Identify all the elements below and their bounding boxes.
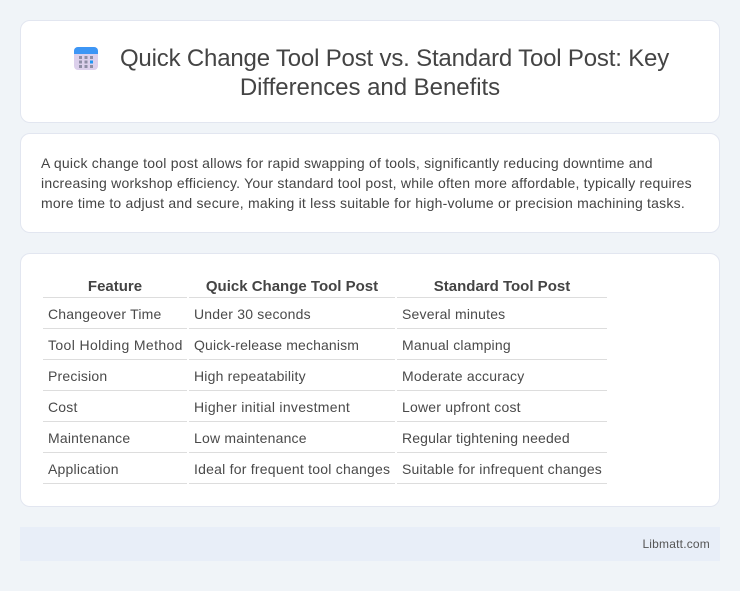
title line 2: Differences and Benefits [240, 74, 500, 101]
intro text [41, 155, 692, 211]
text: Ideal for frequent tool changes [194, 461, 390, 477]
intro card [20, 133, 720, 233]
table row: tool holding method: Tool Holding Method [48, 337, 183, 353]
text: Quick Change Tool Post [206, 278, 378, 295]
table row: precision: Precision [48, 368, 107, 384]
intro text: more time to adjust and secure, making it less suitable for high-volume or precision machining tasks. [41, 195, 685, 211]
text: Regular tightening needed [402, 430, 570, 446]
table row: cost: Cost [48, 399, 78, 415]
text: Lower upfront cost [402, 399, 521, 415]
table card [20, 253, 720, 507]
text: High repeatability [194, 368, 306, 384]
text: Moderate accuracy [402, 368, 524, 384]
table header: Feature [88, 278, 142, 295]
table row: application: Application [48, 461, 119, 477]
footer text: Libmatt.com [642, 537, 710, 551]
text: Under 30 seconds [194, 306, 311, 322]
text: Quick-release mechanism [194, 337, 359, 353]
title card [20, 20, 720, 123]
text: Several minutes [402, 306, 505, 322]
footer bar [20, 527, 720, 561]
text: Suitable for infrequent changes [402, 461, 602, 477]
table row: changeover time: Changeover Time [48, 306, 162, 322]
text: Standard Tool Post [434, 278, 570, 295]
title: Quick Change Tool Post vs. Standard Tool Post: Key [120, 45, 669, 72]
text: Higher initial investment [194, 399, 350, 415]
table row: maintenance: Maintenance [48, 430, 130, 446]
intro text: increasing workshop efficiency. Your standard tool post, while often more affordable, typically requires [41, 175, 692, 191]
intro text: A quick change tool post allows for rapid swapping of tools, significantly reducing downtime and [41, 155, 653, 171]
icon: calendar [74, 47, 98, 70]
text: Manual clamping [402, 337, 511, 353]
text: Low maintenance [194, 430, 307, 446]
